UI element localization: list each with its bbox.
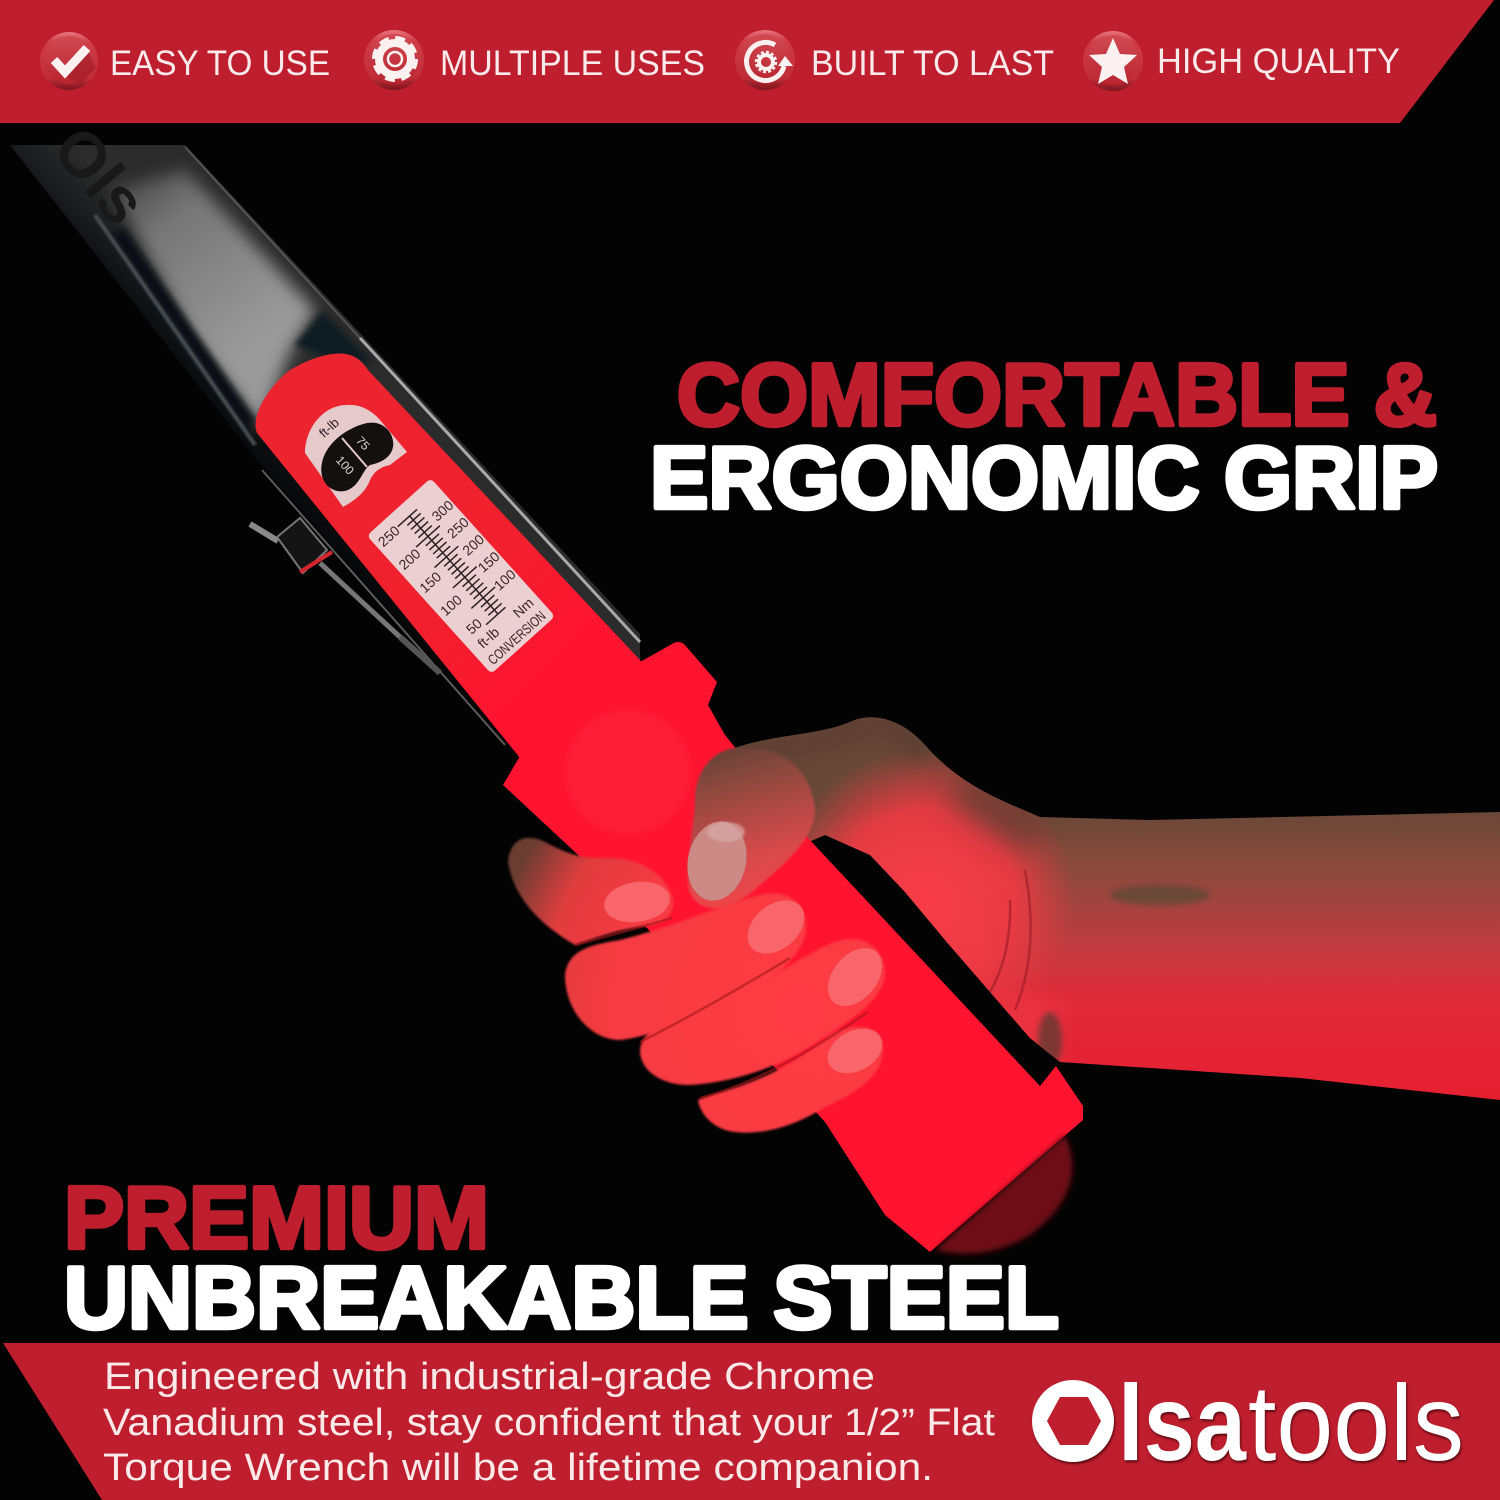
Nm values: 150: [475, 548, 503, 576]
handle end cap glow: [935, 1135, 1072, 1254]
heading: comfortable and ergonomic grip: [650, 345, 1438, 527]
label: HIGH QUALITY: [1157, 42, 1400, 81]
label: MULTIPLE USES: [440, 44, 705, 83]
heading: premium unbreakable steel: PREMIUM: [64, 1168, 489, 1267]
ft-lb values: 200: [395, 545, 424, 573]
gauge value 100: 100: [333, 453, 357, 478]
thumb: [680, 748, 815, 908]
icon: check mark: [40, 32, 98, 90]
middle finger: [565, 890, 815, 1040]
icon: gear: [364, 30, 424, 90]
ft-lb values: 50: [463, 615, 485, 637]
wrench steel shaft: [10, 113, 640, 760]
molded round boss: [566, 710, 690, 834]
heading: premium unbreakable steel: UNBREAKABLE STEEL: [64, 1248, 1059, 1347]
description text: [103, 1356, 995, 1489]
red handle: [503, 642, 1083, 1254]
benefit: multiple uses: [364, 30, 705, 90]
unit labels: ft-lb: [474, 624, 502, 651]
Nm values: 300: [428, 497, 457, 524]
label: BUILT TO LAST: [811, 44, 1054, 83]
description text: Engineered with industrial-grade Chrome: [104, 1356, 875, 1398]
heading: premium unbreakable steel: [64, 1168, 1059, 1347]
conversion scale label: [367, 478, 555, 674]
ft-lb values: 250: [375, 522, 403, 550]
Nm values: 250: [444, 514, 472, 541]
arm and palm: [736, 717, 1500, 1100]
gauge value 75: 75: [353, 434, 373, 453]
unit labels: CONVERSION: [484, 608, 549, 668]
benefit: easy to use: [40, 32, 330, 90]
logo: Olsatools: tools: [1248, 1362, 1464, 1483]
ft-lb values: 150: [416, 568, 444, 596]
Nm values: 100: [491, 566, 519, 593]
benefit: built to last: [735, 30, 1054, 90]
unit labels: Nm: [510, 594, 537, 621]
index finger: [508, 838, 673, 945]
icon: star: [1083, 31, 1143, 91]
ft-lb values: [375, 522, 486, 642]
description text: Torque Wrench will be a lifetime companion.: [103, 1447, 933, 1489]
thumbnail: [680, 816, 754, 906]
logo: Olsatools: lsa: [1118, 1362, 1247, 1483]
engraved shaft lettering: Ols: [39, 113, 161, 238]
logo: Olsatools: [1032, 1360, 1464, 1483]
bottom banner: [3, 1343, 1500, 1500]
icon: cycle gear: [735, 30, 795, 90]
red scale plate: [256, 353, 690, 800]
Nm values: [428, 497, 519, 593]
logo: Olsatools: O: [1038, 1360, 1110, 1481]
Nm values: 200: [459, 531, 487, 559]
ring finger: [640, 938, 893, 1085]
heading: comfortable and ergonomic grip: COMFORTABLE &: [677, 345, 1437, 444]
gauge dial: [321, 423, 393, 491]
little finger: [698, 1020, 890, 1133]
unit labels: [472, 594, 549, 668]
ratchet mechanism: [250, 518, 440, 673]
benefit: high quality: [1083, 31, 1400, 91]
description text: Vanadium steel, stay confident that your 1/2” Flat: [103, 1402, 995, 1444]
heading: comfortable and ergonomic grip: ERGONOMIC GRIP: [650, 428, 1438, 527]
fingers: [508, 838, 893, 1133]
top banner: [0, 0, 1494, 123]
gauge label: ft-lb: [316, 415, 342, 440]
torque gauge window: [305, 405, 407, 507]
ft-lb values: 100: [437, 591, 465, 619]
label: EASY TO USE: [110, 44, 330, 83]
